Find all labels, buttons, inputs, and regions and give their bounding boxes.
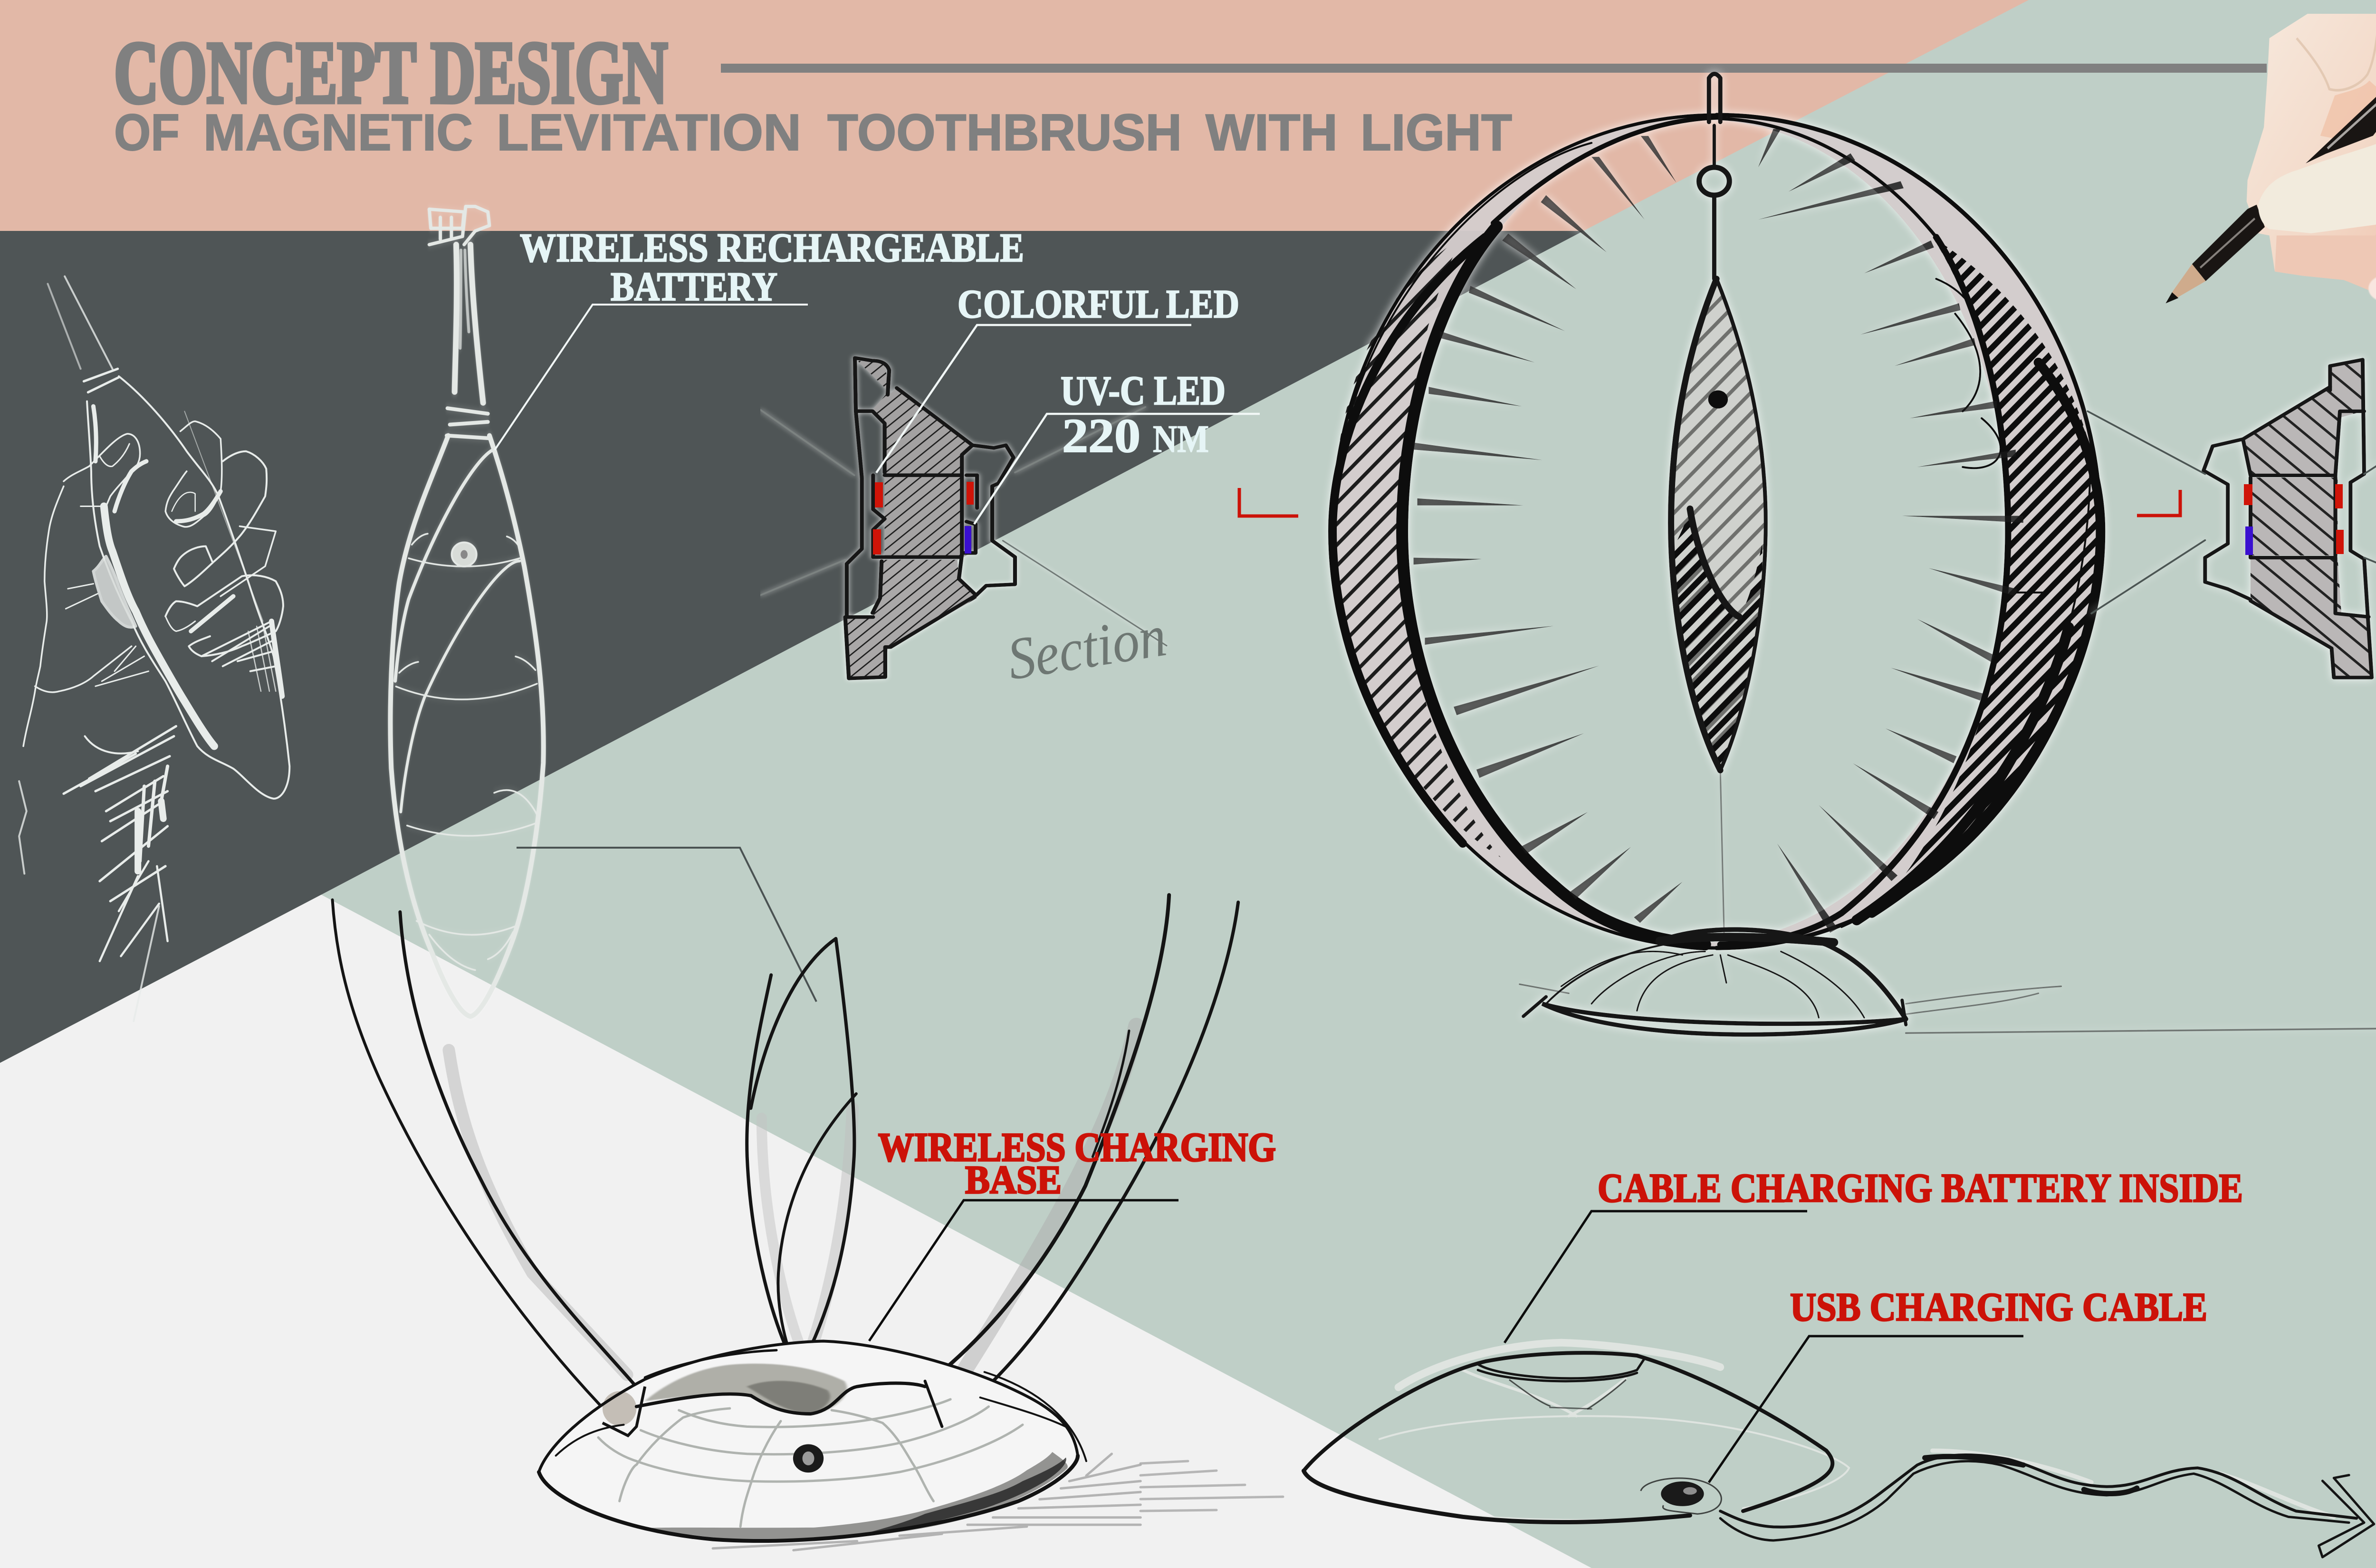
label: wireless rechargeable battery xyxy=(495,225,1024,450)
section detail: left xyxy=(760,358,1167,679)
label: usb charging cable xyxy=(1709,1285,2207,1482)
ring stand base xyxy=(1520,929,2376,1034)
LEDs: left section xyxy=(873,482,974,555)
title rule xyxy=(721,64,2267,73)
LEDs: right section xyxy=(2244,484,2344,555)
subtitle xyxy=(114,104,1512,162)
subtitle: WITH xyxy=(1206,104,1338,162)
ring bands xyxy=(1332,115,2100,947)
usb port xyxy=(1641,1478,1721,1514)
subtitle: MAGNETIC xyxy=(203,104,473,162)
handwritten word: section: Section xyxy=(1003,603,1170,693)
sketch: base side view with usb cable xyxy=(1303,1343,2374,1557)
shadow strokes xyxy=(713,1454,1140,1550)
dome xyxy=(539,1341,1140,1550)
dome port xyxy=(793,1444,824,1472)
shadow strokes beyond dome xyxy=(1140,1461,1283,1511)
ring outlines xyxy=(1332,115,2100,948)
crop mark: left xyxy=(1239,488,1298,516)
hanging toothbrush xyxy=(1671,279,1766,770)
arm sockets xyxy=(603,1386,645,1435)
label: uv-c led 220 nm: NM xyxy=(1153,417,1209,460)
cable xyxy=(1720,1455,2374,1557)
label: uv-c led 220 nm: 220 xyxy=(1062,409,1140,463)
subtitle: LIGHT xyxy=(1360,104,1512,162)
label: wireless rechargeable battery: WIRELESS RECHARGEABLE xyxy=(520,225,1024,270)
dome shadow xyxy=(636,1452,1068,1540)
label: colorful led: COLORFUL LED xyxy=(958,282,1239,326)
toothbrush leader line xyxy=(517,848,816,1002)
toothbrush neck xyxy=(455,245,483,403)
subtitle: LEVITATION xyxy=(497,104,801,162)
crop mark: right xyxy=(2137,490,2180,516)
pencil xyxy=(2306,52,2376,163)
label: colorful led xyxy=(876,282,1239,473)
label: wireless charging base xyxy=(869,1124,1276,1341)
dome outline xyxy=(539,1341,1086,1541)
dome surface grid xyxy=(598,1399,1023,1527)
sketch: toothbrush (white line drawing) xyxy=(390,206,544,1016)
sketch: wireless charging base with arms xyxy=(333,895,1283,1550)
section detail: right xyxy=(2088,360,2376,678)
subtitle: OF xyxy=(114,104,180,162)
sketch: ring lamp with levitating toothbrush xyxy=(1332,74,2376,1034)
arms and central leaf xyxy=(333,895,1238,1433)
label: usb charging cable: USB CHARGING CABLE xyxy=(1790,1285,2207,1329)
label: cable charging battery inside: CABLE CHARGING BATTERY INSIDE xyxy=(1598,1165,2243,1211)
white chalk highlights xyxy=(1326,1343,2334,1520)
toothbrush collar xyxy=(447,408,489,438)
label: cable charging battery inside xyxy=(1504,1165,2243,1343)
label: uv-c led 220 nm xyxy=(974,367,1260,524)
sketch: hand holding toothbrush xyxy=(19,277,289,1021)
label: uv-c led 220 nm: UV-C LED xyxy=(1061,367,1226,413)
toothbrush body xyxy=(390,436,544,1016)
toothbrush head xyxy=(429,206,489,245)
photo illustration: hand with pencil xyxy=(2165,14,2376,310)
label: wireless rechargeable battery: BATTERY xyxy=(611,264,777,309)
side view dome outline xyxy=(1303,1353,1832,1522)
label: wireless charging base: WIRELESS CHARGING xyxy=(878,1124,1276,1170)
label: wireless charging base: BASE xyxy=(965,1158,1062,1202)
ring spokes xyxy=(1414,129,2023,933)
thumb xyxy=(2258,125,2376,233)
title: concept design: CONCEPT DESIGN xyxy=(114,24,668,122)
subtitle: TOOTHBRUSH xyxy=(827,104,1182,162)
dome smudge xyxy=(645,1364,847,1415)
